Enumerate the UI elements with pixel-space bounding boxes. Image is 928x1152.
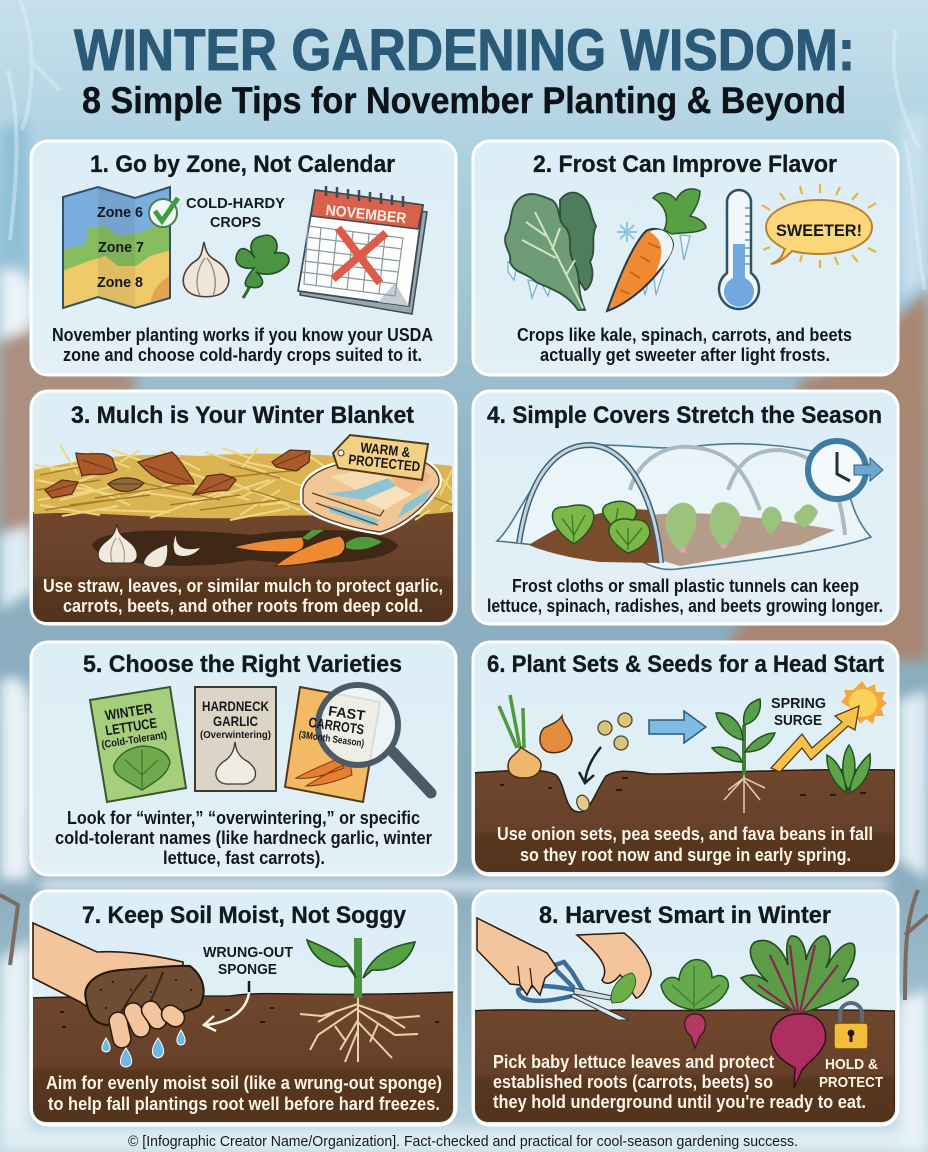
soil layer <box>470 1010 895 1125</box>
icon: sun <box>841 681 887 724</box>
body text 3: Use straw, leaves, or similar mulch to protect garlic, <box>43 576 443 596</box>
icon: radish <box>661 960 728 1048</box>
icon: thermometer <box>719 190 759 309</box>
body text 4 <box>487 576 883 616</box>
icon: hand with fingers <box>477 918 557 995</box>
icon: carrot seed packet and magnifier <box>285 685 431 802</box>
icon: lettuces <box>552 501 650 553</box>
icon: carrots <box>233 530 382 566</box>
icon: garlic seed packet: GARLIC <box>213 713 258 729</box>
callout: sweeter: SWEETER! <box>776 221 862 240</box>
body text 8: Pick baby lettuce leaves and protect <box>493 1052 774 1072</box>
icon: garlic <box>183 242 229 297</box>
subtitle: 8 Simple Tips for November Planting & Beyond <box>82 80 846 121</box>
body text 2: Crops like kale, spinach, carrots, and beets <box>517 325 852 345</box>
body text 5: cold-tolerant names (like hardneck garlic, winter <box>55 828 432 848</box>
body text 2: actually get sweeter after light frosts. <box>540 345 830 365</box>
panel 8: harvest smart <box>470 891 898 1125</box>
icon: onion set <box>540 716 572 753</box>
tag: warm and protected: WARM & <box>360 439 411 460</box>
icon: zone map: Zone 7 <box>98 239 144 256</box>
footer credit: © [Infographic Creator Name/Organization]. Fact-checked and practical for cool-season gardening success. <box>128 1134 798 1150</box>
icon: frosted kale <box>505 193 596 310</box>
panel 4: simple covers <box>473 391 898 624</box>
panel 7: keep soil moist <box>30 891 456 1125</box>
icon: carrot seed packet and magnifier: FAST <box>327 702 367 724</box>
label: spring surge <box>771 695 826 729</box>
tag: warm and protected <box>333 435 428 480</box>
icon: rooted seedling <box>712 699 775 813</box>
body text 6: so they root now and surge in early spring. <box>520 845 851 865</box>
icon: faded spinach plants <box>666 502 818 553</box>
panel 1: go by zone <box>31 141 456 375</box>
label: cold-hardy crops: COLD-HARDY <box>186 195 285 212</box>
icon: scissors <box>518 962 629 1020</box>
label: hold and protect: HOLD & <box>825 1056 878 1073</box>
icon: check mark <box>149 198 178 227</box>
body text 8: established roots (carrots, beets) so <box>493 1072 773 1092</box>
label: wrung-out sponge: WRUNG-OUT <box>203 944 293 961</box>
icon: hand picking lettuce <box>577 933 651 1003</box>
panel 5: varieties <box>31 642 456 875</box>
heading 1: 1. Go by Zone, Not Calendar <box>90 151 395 178</box>
icon: water drops <box>102 1030 185 1067</box>
icon: frosted carrot <box>607 189 706 311</box>
arrow: yellow growth <box>771 706 859 772</box>
icon: garlic seed packet <box>195 687 276 791</box>
icon: carrot seed packet and magnifier: (3Month Season) <box>298 730 365 750</box>
icon: spinach leaf <box>236 235 289 298</box>
body text 6 <box>497 824 873 865</box>
icon: zone map: Zone 8 <box>97 274 143 291</box>
body text 5: Look for “winter,” “overwintering,” or specific <box>67 808 420 828</box>
body text 8 <box>493 1052 866 1112</box>
heading 3: 3. Mulch is Your Winter Blanket <box>71 402 414 429</box>
icon: pea sprout <box>827 745 870 793</box>
label: cold-hardy crops: CROPS <box>210 214 261 231</box>
body text 1: zone and choose cold-hardy crops suited to it. <box>63 345 422 365</box>
body text 5 <box>55 808 432 868</box>
body text 7: to help fall plantings root well before hard freezes. <box>48 1094 440 1114</box>
icon: lettuce seed packet: LETTUCE <box>104 714 158 738</box>
soil layer <box>30 992 456 1125</box>
icon: padlock <box>834 1003 868 1049</box>
heading 7: 7. Keep Soil Moist, Not Soggy <box>82 902 406 929</box>
soil with furrow <box>470 770 895 880</box>
arrow: seed into soil <box>579 747 601 783</box>
body text 3 <box>43 576 443 616</box>
arrow: blue <box>649 711 706 743</box>
body text 7: Aim for evenly moist soil (like a wrung-out sponge) <box>46 1073 442 1093</box>
icon: sprouting onion <box>499 695 541 778</box>
body text 5: lettuce, fast carrots). <box>163 848 325 868</box>
straw mulch <box>34 445 452 520</box>
panel 2: frost improves flavor <box>473 141 898 375</box>
label: cold-hardy crops <box>186 195 285 231</box>
icon: lettuce seed packet: (Cold-Tolerant) <box>101 729 168 751</box>
body text 2 <box>517 325 852 365</box>
heading 2: 2. Frost Can Improve Flavor <box>533 151 837 178</box>
icon: garlic seed packet: (Overwintering) <box>200 729 271 741</box>
soil layer <box>30 512 456 625</box>
icon: calendar with cross: NOVEMBER <box>325 202 407 227</box>
icon: fallen leaves <box>45 450 310 498</box>
icon: hand wringing sponge <box>33 923 204 1049</box>
body text 7 <box>46 1073 442 1114</box>
label: hold and protect <box>819 1056 883 1091</box>
heading 6: 6. Plant Sets & Seeds for a Head Start <box>487 651 884 678</box>
icon: pea seeds <box>575 713 632 813</box>
icon: rooted plant <box>300 938 420 1062</box>
arrow: to sponge <box>204 981 249 1031</box>
label: hold and protect: PROTECT <box>819 1074 883 1091</box>
body text 8: they hold underground until you're ready to eat. <box>493 1092 866 1112</box>
body text 3: carrots, beets, and other roots from deep cold. <box>63 596 423 616</box>
icon: clock with arrow <box>808 441 883 499</box>
label: wrung-out sponge: SPONGE <box>218 961 277 978</box>
icon: garlic seed packet: HARDNECK <box>202 698 269 714</box>
heading 4: 4. Simple Covers Stretch the Season <box>487 402 882 429</box>
callout: sweeter <box>762 184 876 268</box>
tag: warm and protected: PROTECTED <box>348 451 421 475</box>
label: wrung-out sponge <box>203 944 293 978</box>
illustration: low tunnel <box>497 444 871 569</box>
body text 1 <box>52 325 433 365</box>
title: WINTER GARDENING WISDOM: <box>74 18 855 83</box>
icon: zone map <box>60 185 172 310</box>
body text 4: Frost cloths or small plastic tunnels can keep <box>512 576 859 596</box>
label: spring surge: SURGE <box>774 712 822 729</box>
label: spring surge: SPRING <box>771 695 826 712</box>
panel 3: mulch blanket <box>30 391 456 625</box>
icon: lettuce seed packet <box>90 687 186 802</box>
body text 1: November planting works if you know your USDA <box>52 325 433 345</box>
icon: lettuce seed packet: WINTER <box>104 700 154 723</box>
icon: carrot seed packet and magnifier: CARROTS <box>308 714 365 737</box>
panel 6: sets and seeds <box>470 642 898 880</box>
icon: zone map: Zone 6 <box>97 204 143 221</box>
body text 6: Use onion sets, pea seeds, and fava beans in fall <box>497 824 873 844</box>
icon: garlic and cloves <box>98 524 200 567</box>
heading 8: 8. Harvest Smart in Winter <box>539 902 831 929</box>
icon: calendar with cross <box>298 186 427 314</box>
heading 5: 5. Choose the Right Varieties <box>83 651 402 678</box>
icon: beet <box>741 936 858 1088</box>
body text 4: lettuce, spinach, radishes, and beets growing longer. <box>487 596 883 616</box>
icon: folded quilt <box>303 458 439 532</box>
